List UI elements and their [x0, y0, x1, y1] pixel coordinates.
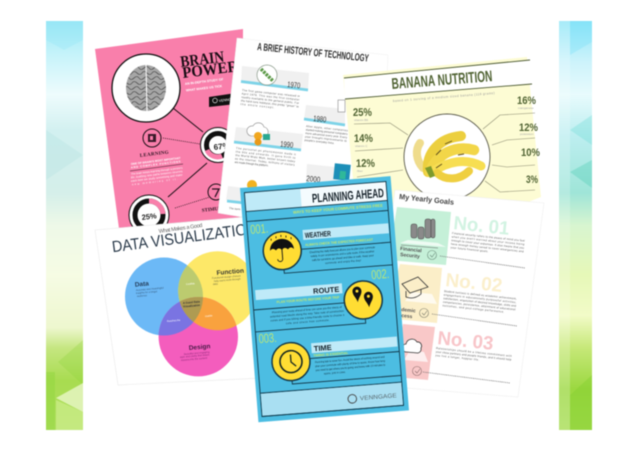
goal 03: Relationships should be a lifetime commitment with — [436, 346, 512, 358]
frame lines — [244, 182, 404, 416]
section: route: Planning your route ahead of time can save you the stress of — [272, 305, 342, 314]
venn diagram — [125, 251, 257, 376]
poster: banana nutrition — [343, 57, 541, 240]
heading: brain power: AN IN-DEPTH STUDY OF — [185, 77, 224, 86]
icon and label: stimulation: STIMULATION — [202, 205, 238, 214]
nutrient stats: right — [517, 95, 540, 186]
venn label: data: Accurate and meaningful — [136, 287, 164, 292]
donut chart: 67% — [200, 128, 236, 162]
icon and label: stimulation — [202, 184, 238, 214]
goal 02: Success — [392, 312, 413, 320]
heading: yearly goals: My Yearly Goals — [399, 192, 454, 207]
text block: learning: ONE OF BRAIN'S MOST IMPORTANT — [131, 156, 181, 166]
timeline section: 1970 — [240, 65, 309, 112]
timeline section: 1980 — [304, 100, 349, 146]
timeline section: bottom left — [226, 180, 262, 211]
nutrient stats: left: vitamin B6 — [354, 118, 368, 122]
heading band: BANANA NUTRITION — [391, 68, 493, 93]
text block: learning: LEARNING — [140, 150, 169, 159]
timeline section: 1970: The first game computer was released in — [242, 88, 300, 98]
nutrient stats: left: 12% — [356, 158, 375, 170]
heading: brain power: POWER — [181, 58, 239, 82]
subtitle: WAYS TO KEEP YOUR COMMUTE STRESS FREE — [293, 203, 383, 215]
venn label: function: help users work through — [214, 278, 241, 283]
connector lines — [163, 108, 210, 208]
venn label: design: Beautiful and engaging — [184, 351, 210, 356]
text block: learning: life, building new paths between neurons — [131, 169, 183, 179]
background strip: right — [559, 21, 592, 430]
nutrient stats: right: 10% — [521, 147, 540, 159]
section: time: spare, just in case. — [324, 370, 346, 375]
venn label: centre: Usable — [205, 314, 213, 318]
goal 01 — [388, 207, 525, 268]
section: time: plan your commute with plenty of time to spare. Know how long — [315, 359, 386, 368]
goal 03 — [395, 324, 512, 383]
section: route: safe and stress free commute. — [286, 318, 330, 325]
nutrient stats: left: 25% — [353, 107, 372, 119]
icon: graduation cap — [402, 277, 428, 298]
timeline section: 1970: the whole concept. — [240, 102, 275, 109]
timeline section: 1970: 1970 — [287, 80, 301, 90]
timeline section: 1990: The personal-pc phenomenon made it — [236, 146, 296, 156]
goal 01: Security — [400, 252, 420, 260]
venn label: function — [212, 268, 244, 286]
background strip: left — [46, 21, 83, 430]
timeline section: 2000: 2000 — [306, 174, 321, 184]
goal 03: your close partners and people friends, and it should help — [436, 350, 512, 362]
logo badge — [209, 93, 239, 107]
goal 02: outcomes, and post-college performance. — [442, 303, 505, 314]
section: time: TIME — [313, 343, 332, 353]
goal 01: Financial security refers to the peace of mind you feel — [452, 231, 525, 243]
connector lines — [354, 113, 535, 192]
venn label: function: Functional design choices — [212, 274, 241, 280]
venn label: data: Data — [135, 280, 150, 289]
goal 01: Financial — [400, 246, 423, 254]
poster: brief history of technology — [218, 38, 388, 240]
nutrient stats: right: manganese — [518, 106, 534, 110]
nutrient stats: right: potassium — [520, 132, 534, 136]
poster: data visualization — [95, 217, 262, 385]
section: time: TIMING IS ESSENTIAL — [313, 351, 348, 358]
timeline section: 1990: as the internet. Today, millions of visitors — [235, 156, 296, 167]
heading: brain power — [179, 49, 239, 92]
section: weather: ALWAYS CHECK THE EXPECTED FORECAST — [305, 238, 374, 247]
timeline section: 1970: the hard-core hobbyist, this pretty "green" to — [241, 98, 299, 109]
donut chart: 25%: 25% — [141, 211, 157, 222]
text block: learning: each time we study something and make — [131, 173, 183, 183]
banana illustration — [404, 114, 490, 200]
goal 03: No. 03 — [436, 328, 494, 355]
footer band: VENNGAGE — [360, 393, 397, 402]
logo badge: VENNGAGE — [219, 97, 239, 103]
timeline section: 1990: are made through the platform. — [234, 160, 269, 167]
icon: coins — [411, 219, 435, 239]
text block: learning — [130, 150, 183, 186]
icon: cloud — [402, 339, 422, 353]
timeline section: 1980: people's everyday lives. — [304, 138, 335, 145]
section: weather: calls for sunshine, go ahead and bike or walk. Keep your — [312, 253, 374, 262]
goal 02: satisfaction, acquisition of desired knowledge, skills and — [443, 296, 517, 308]
venn label: design: viewers into the content — [181, 357, 208, 362]
icon: learning — [143, 129, 161, 147]
venn label: centre: Reaches the — [167, 319, 181, 323]
section: time: 003. — [258, 330, 277, 346]
timeline section: 1980: 1980 — [313, 114, 327, 124]
timeline section: 1970: readily available to the general public. For — [241, 95, 299, 105]
heading band — [344, 60, 532, 103]
text block: learning: The brain keeps learning through a person's — [131, 166, 183, 176]
section: weather: commute and enjoy the day! — [325, 258, 361, 265]
poster: yearly goals — [370, 190, 544, 397]
section: weather: safely. It can snowstorms and a safe route. If the weather — [310, 249, 375, 258]
venn label: design: style and clarity that draws — [180, 353, 210, 359]
heading: history: A BRIEF HISTORY OF TECHNOLOGY — [257, 41, 369, 65]
timeline section: 2000 — [306, 163, 351, 188]
nutrient stats: left: vitamin C — [355, 144, 368, 148]
venn label: centre: Credible — [186, 282, 196, 286]
section: route: 002. — [371, 266, 390, 282]
donut chart: 25% — [129, 195, 169, 235]
goal 03: you live a longer, happier life. — [435, 353, 480, 362]
section: route: potential road blocks along the way. Take note of construction — [270, 309, 345, 319]
nutrient stats: right: 3% — [526, 174, 538, 186]
icon: umbrella — [262, 230, 303, 271]
timeline section: 1990: 1990 — [280, 140, 294, 150]
timeline section: 1970: April 1976. This was the first computer — [242, 91, 300, 102]
section: time: you need to get where you're going and leave with 10 minutes to — [315, 363, 386, 372]
section: time: Running late is never fun. Avoid the stress of rushing around and — [315, 355, 385, 364]
venn label: data: insights for a target — [136, 290, 158, 295]
venn label: function: Function — [216, 268, 244, 277]
nutrient stats: right: 16% — [517, 95, 536, 107]
footer band — [260, 383, 404, 416]
header band: PLANNING AHEAD — [312, 186, 384, 206]
poster: planning ahead — [240, 176, 409, 422]
goal 02: competencies, persistence, attainment of educational — [443, 300, 516, 311]
venn label: design — [180, 343, 211, 362]
timeline section: 1990 — [234, 123, 303, 170]
venn label: centre: Visualization — [183, 303, 200, 308]
goal 02: engagement in educationally purposeful activities, — [444, 293, 517, 304]
heading: brain power: BRAIN — [179, 49, 226, 71]
heading: data visualization: DATA VISUALIZATION — [111, 220, 258, 256]
section: route: ROUTE — [313, 285, 340, 296]
goal 01: your future financial goals. — [450, 245, 489, 253]
icon: clock — [271, 341, 311, 382]
goal 01: No. 01 — [452, 213, 511, 240]
header band — [244, 182, 387, 212]
goal 02: Student success is defined as academic achievement, — [444, 289, 517, 301]
section: weather — [250, 211, 392, 276]
section: route — [251, 266, 393, 332]
heading: brain power: WHAT MAKES US TICK — [186, 84, 223, 92]
text block: learning: new memories of it. — [132, 177, 178, 186]
timeline section: 1980: more advanced every year. Every — [305, 131, 348, 139]
section: weather: WEATHER — [305, 229, 332, 240]
timeline section: 1990: the World Wide Web, better known today — [235, 153, 296, 163]
goal 01: when you aren't worried about your income being — [452, 235, 525, 246]
text block: learning: AND COMPLEX FUNCTIONS — [131, 159, 181, 169]
venn label: design: Design — [189, 343, 211, 352]
nutrient stats: right: 12% — [519, 122, 538, 134]
section: route: PLAN YOUR ROUTE BEFORE YOUR TRIP — [276, 295, 340, 304]
timeline section: bottom left: The semi- — [229, 206, 241, 211]
section: weather: 001. — [250, 221, 269, 237]
goal 02 — [385, 264, 517, 326]
poster: brain power — [95, 29, 243, 236]
goal 01: have enough money saved to cover emergencies and — [451, 242, 524, 253]
icon: brain — [112, 54, 180, 122]
timeline section: 1980: After Apple, other companies — [306, 124, 349, 132]
section: route: zones and if you biking use a bike-friendly route to choose a — [270, 313, 345, 323]
goal 01: enough to cover your expenses. It also means that you — [451, 238, 525, 250]
timeline section: 1990: the 90s and onwards. It gave birth to — [236, 149, 296, 160]
section: weather: Checking the daily forecast allows you to plan your commute — [309, 245, 376, 254]
heading band: based on 1 serving of a medium sized banana (118 grams) — [393, 91, 495, 103]
icon: map pins — [343, 280, 384, 320]
venn label: data — [135, 280, 164, 298]
venn label: centre — [167, 282, 213, 323]
venn label: function: data — [213, 283, 219, 286]
nutrient stats: left: 14% — [354, 133, 373, 145]
donut chart: 67%: 67% — [213, 141, 230, 152]
heading: data visualization: What Makes a Good — [158, 223, 203, 235]
timeline section: 1980: started making personal computers — [306, 127, 348, 136]
goal 02: Academic — [392, 306, 416, 314]
venn label: centre: A Good Data — [183, 300, 200, 305]
nutrient stats: left: fiber — [357, 169, 363, 173]
goal 02: No. 02 — [444, 270, 503, 297]
nutrient stats: left — [353, 107, 375, 173]
venn label: data: audience — [137, 294, 148, 298]
timeline section: 1980: year brought improvements to — [305, 134, 347, 143]
section: time — [258, 320, 401, 386]
